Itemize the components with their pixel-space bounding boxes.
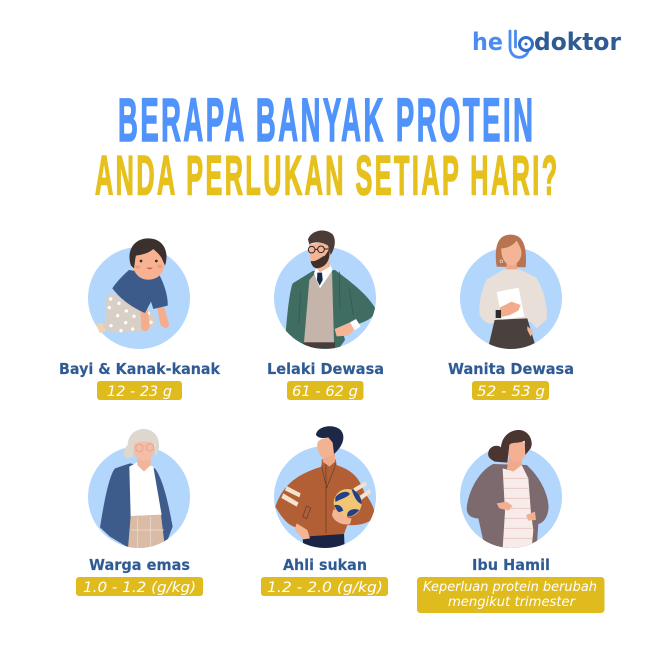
panel: athlete bbox=[261, 426, 388, 596]
value: 12 - 23 g bbox=[107, 384, 172, 400]
circle backdrop bbox=[88, 247, 190, 349]
logo: hellodoktor: doktor bbox=[534, 28, 621, 56]
value text: mengikut trimester bbox=[448, 594, 576, 610]
value pill bbox=[97, 381, 182, 400]
title line 2: ANDA PERLUKAN SETIAP HARI? bbox=[95, 145, 557, 207]
illustration: senior bbox=[100, 429, 173, 548]
circle backdrop bbox=[460, 446, 562, 548]
value text: Keperluan protein berubah bbox=[423, 579, 597, 595]
label: Bayi & Kanak-kanak bbox=[59, 360, 221, 378]
logo: hellodoktor: he bbox=[472, 28, 503, 56]
label: Warga emas bbox=[89, 556, 190, 574]
circle backdrop bbox=[274, 247, 376, 349]
value pill bbox=[261, 577, 388, 596]
panel: adult woman bbox=[448, 235, 574, 400]
panel: senior bbox=[76, 429, 203, 596]
circle backdrop bbox=[88, 446, 190, 548]
label: Wanita Dewasa bbox=[448, 360, 574, 378]
value pill bbox=[287, 381, 364, 400]
value pill bbox=[472, 381, 549, 400]
title bbox=[95, 87, 557, 207]
illustration: pregnant woman bbox=[467, 430, 549, 548]
circle backdrop bbox=[460, 247, 562, 349]
illustration: baby bbox=[96, 238, 169, 333]
value: 61 - 62 g bbox=[292, 384, 358, 400]
label: Ibu Hamil bbox=[472, 556, 550, 574]
circle backdrop bbox=[274, 446, 376, 548]
title line 1: BERAPA BANYAK PROTEIN bbox=[118, 87, 533, 155]
value: 1.0 - 1.2 (g/kg) bbox=[83, 580, 196, 596]
value: 1.2 - 2.0 (g/kg) bbox=[267, 580, 383, 596]
value: 52 - 53 g bbox=[477, 384, 545, 400]
label: Lelaki Dewasa bbox=[267, 360, 384, 378]
panel: pregnant mother bbox=[417, 430, 604, 613]
illustration: athlete bbox=[275, 426, 375, 548]
illustration: woman bbox=[479, 235, 547, 352]
label: Ahli sukan bbox=[283, 556, 367, 574]
value pill bbox=[417, 577, 604, 613]
panel: baby bbox=[59, 238, 221, 400]
illustration: man bbox=[285, 231, 375, 352]
value pill bbox=[76, 577, 203, 596]
logo: hellodoktor bbox=[472, 28, 621, 57]
panel: adult man bbox=[267, 231, 384, 400]
